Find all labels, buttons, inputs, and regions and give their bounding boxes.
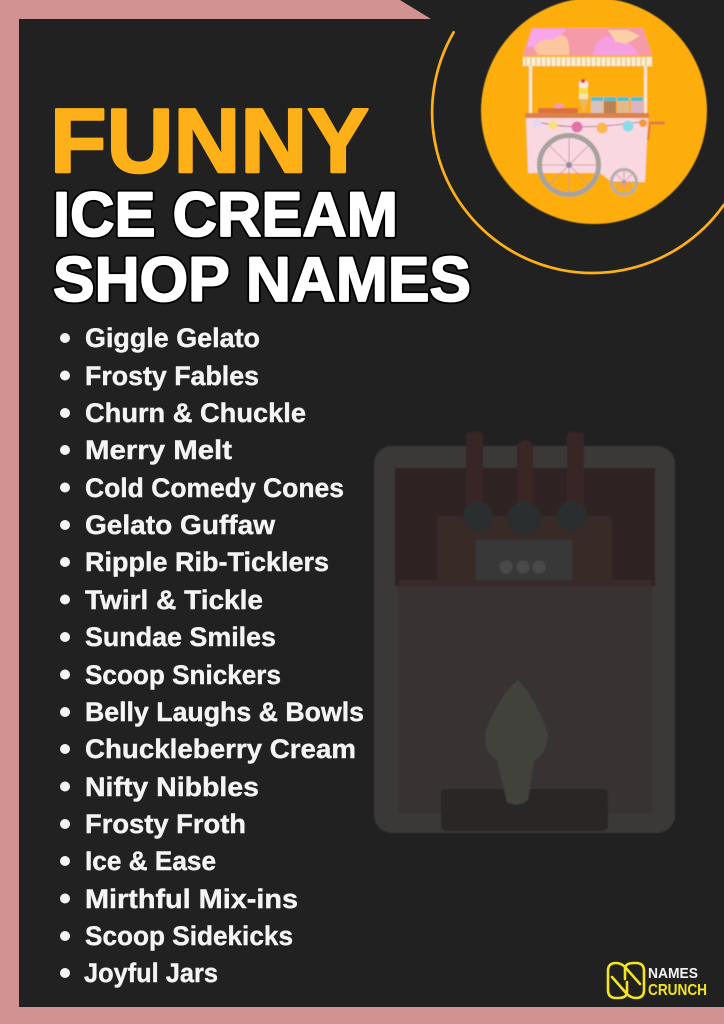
icon: ice cream cart in orange circle	[481, 0, 707, 224]
icon: faded soft-serve machine	[374, 432, 675, 833]
logo: Names Crunch	[608, 963, 707, 999]
bulleted name list: Chuckleberry Cream	[85, 734, 356, 764]
title: ICE CREAM: ICE CREAM	[53, 180, 398, 250]
title: ICE CREAM: ICE CREAM	[53, 180, 398, 250]
bulleted name list: Giggle Gelato	[85, 323, 260, 353]
bulleted name list: Scoop Snickers	[85, 660, 281, 690]
title: SHOP NAMES: SHOP NAMES	[53, 245, 471, 315]
bulleted name list	[60, 323, 364, 988]
bulleted name list: Ripple Rib-Ticklers	[85, 547, 329, 577]
bulleted name list: Sundae Smiles	[85, 622, 276, 652]
bulleted name list: Merry Melt	[85, 435, 232, 465]
bulleted name list: Scoop Sidekicks	[85, 921, 293, 951]
logo: Names Crunch: NAMES	[648, 966, 698, 982]
accent ring	[432, 32, 724, 273]
bulleted name list: Churn & Chuckle	[85, 398, 306, 428]
title: FUNNY: FUNNY	[50, 91, 369, 192]
bulleted name list: Frosty Froth	[85, 809, 246, 839]
logo: Names Crunch: CRUNCH	[648, 982, 707, 999]
title: SHOP NAMES: SHOP NAMES	[53, 245, 471, 315]
bulleted name list: Frosty Fables	[85, 361, 259, 391]
bulleted name list: Cold Comedy Cones	[85, 473, 344, 503]
bulleted name list: Belly Laughs & Bowls	[85, 697, 364, 727]
bulleted name list: Nifty Nibbles	[85, 772, 259, 802]
bulleted name list: Ice & Ease	[85, 846, 216, 876]
bulleted name list: Joyful Jars	[84, 958, 218, 988]
bulleted name list: Gelato Guffaw	[85, 510, 276, 540]
bulleted name list: Twirl & Tickle	[85, 585, 263, 615]
bulleted name list: Mirthful Mix-ins	[85, 884, 298, 914]
